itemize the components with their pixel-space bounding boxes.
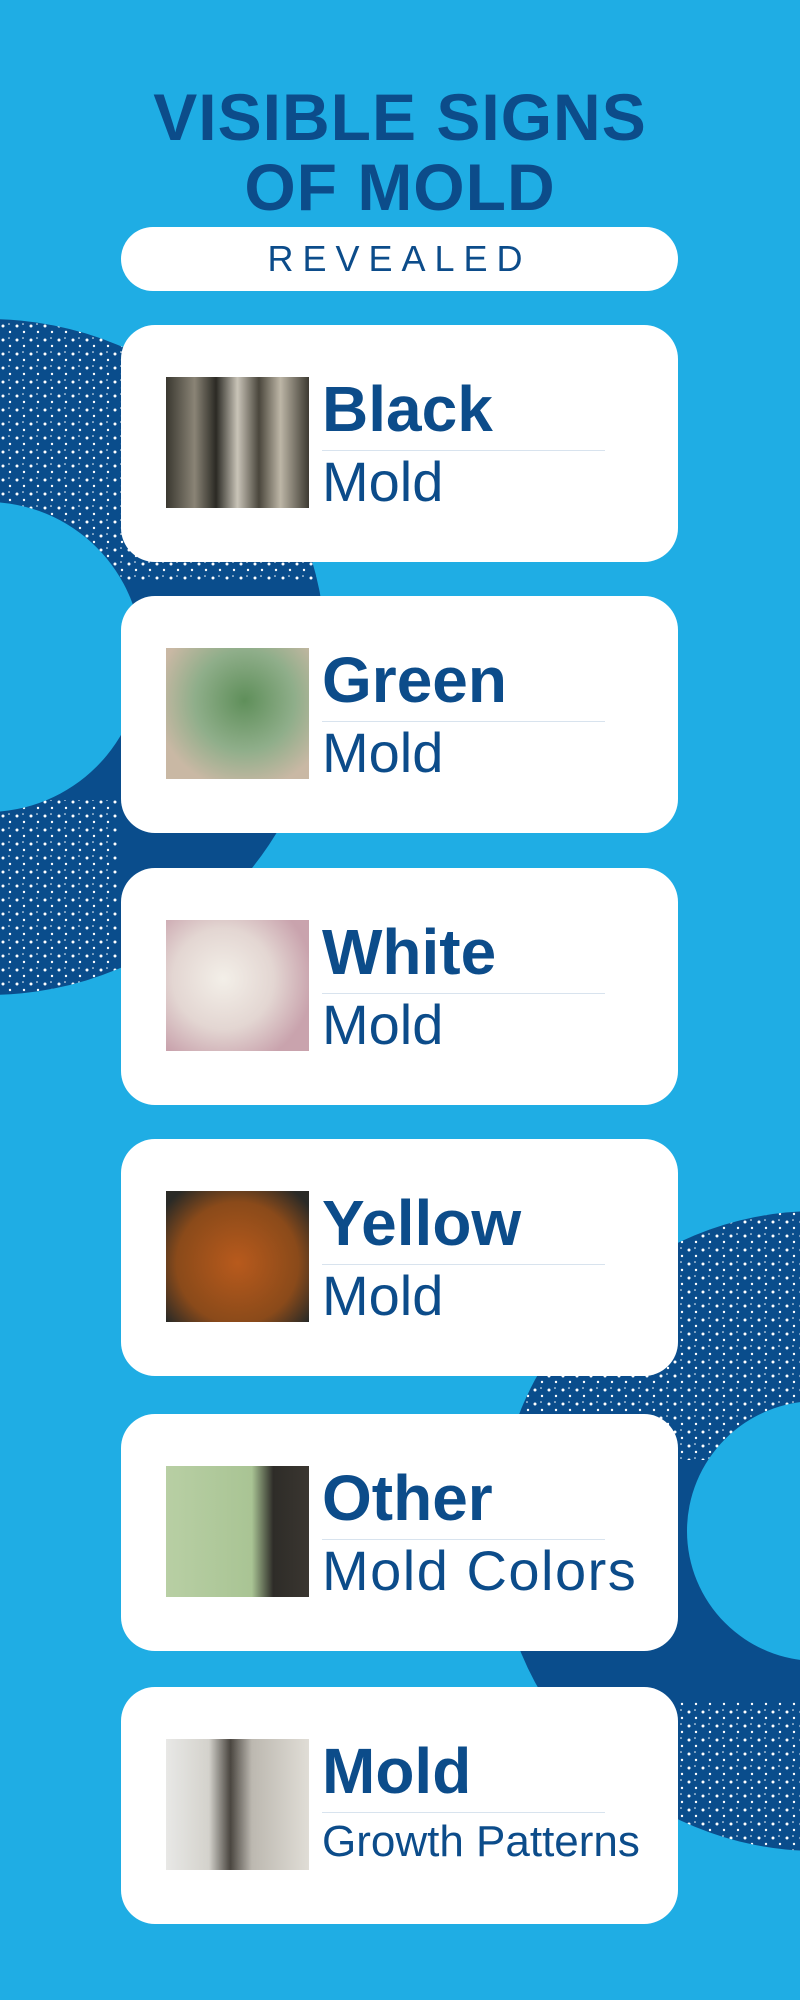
image: black mold [166,377,309,508]
card: yellow mold [121,1139,678,1376]
image: other mold [166,1466,309,1597]
title: VISIBLE SIGNS [153,80,647,154]
image: growth patterns [166,1739,309,1870]
subheading: Mold [322,721,443,784]
heading: Other: Other [322,1462,493,1534]
heading: White: White [322,916,496,988]
title [153,80,647,224]
card: green mold [121,596,678,833]
card: white mold [121,868,678,1105]
decorative rings [0,319,800,1850]
subheading: Mold [322,1264,443,1327]
subtitle pill [121,227,678,291]
subheading: Mold Colors [322,1539,637,1602]
heading: Yellow: Yellow [322,1187,521,1259]
card: black mold [121,325,678,562]
card: other colors [121,1414,678,1651]
image: yellow mold [166,1191,309,1322]
heading: Mold: Mold [322,1735,471,1807]
heading: Black: Black [322,373,493,445]
image: white mold [166,920,309,1051]
card: growth patterns [121,1687,678,1924]
title: OF MOLD [244,150,556,224]
subheading: Mold [322,993,443,1056]
subheading: Growth Patterns [322,1817,640,1866]
subtitle pill: REVEALED [267,238,532,279]
heading: Green: Green [322,644,507,716]
subheading: Mold [322,450,443,513]
image: green mold [166,648,309,779]
